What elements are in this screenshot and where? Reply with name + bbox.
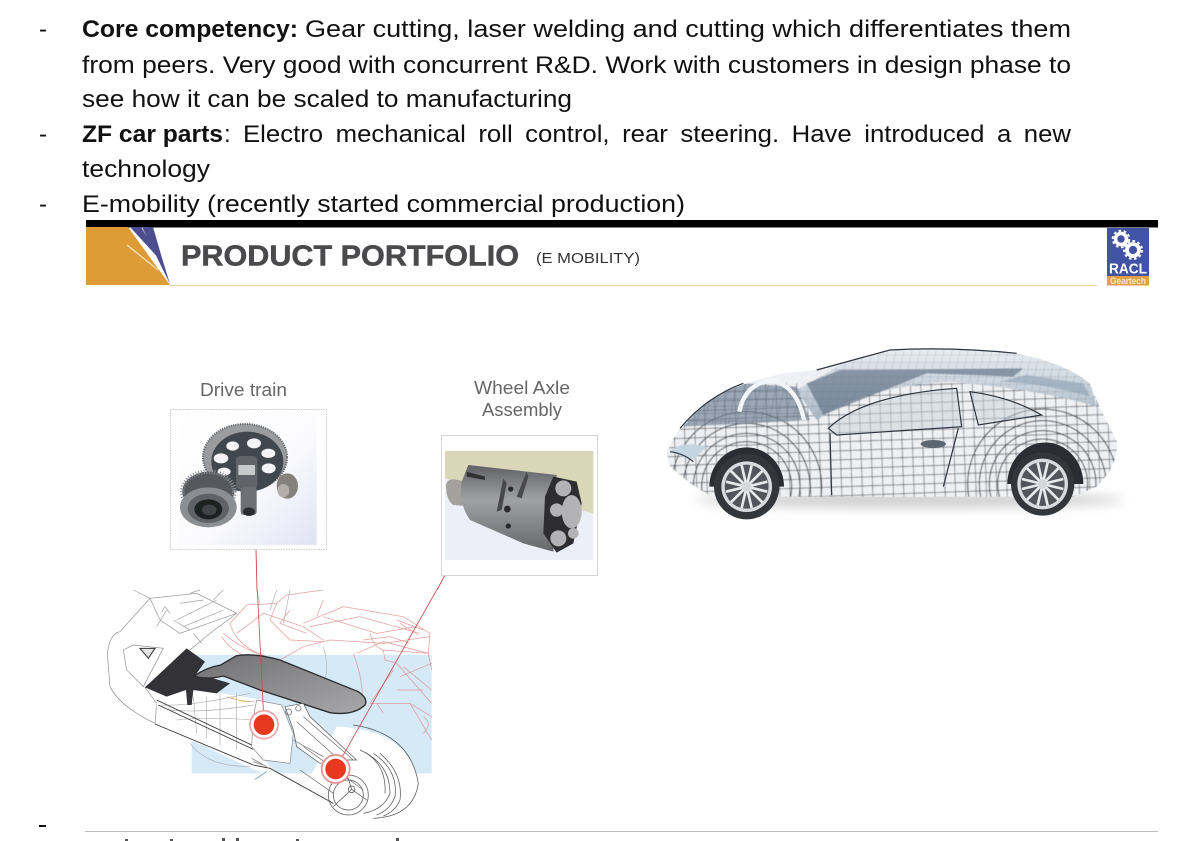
illustration: wireframe car	[667, 348, 1120, 520]
motorcycle line drawing	[107, 590, 437, 818]
windshield and roof glass	[797, 350, 1097, 420]
swing arm	[285, 703, 357, 763]
marker: wheel axle position	[322, 755, 350, 783]
logo: RACL Geartech: RACL	[1109, 260, 1147, 278]
seat	[194, 655, 366, 713]
dark frame	[145, 648, 230, 705]
label: wheel axle assembly	[474, 378, 570, 420]
logo: RACL Geartech: Geartech	[1110, 276, 1146, 286]
hood shading	[683, 383, 810, 427]
label: drive train: Drive train	[200, 380, 287, 400]
bullet: ZF car parts: -	[39, 121, 47, 148]
red ghost rear frame lines	[222, 590, 432, 740]
bullet: ZF car parts: technology	[82, 156, 210, 183]
footer dash and rule	[39, 825, 1158, 841]
bullet: ZF car parts: Electro mechanical roll control, rear steering. Have introduced a new	[243, 121, 1072, 148]
leader line: wheel axle	[337, 590, 437, 767]
leader line: wheel axle upper	[437, 575, 445, 590]
rear wheel	[1007, 442, 1083, 516]
title: PRODUCT PORTFOLIO	[181, 240, 519, 272]
bullet: core competency	[39, 16, 1071, 113]
body lines	[670, 349, 1042, 495]
bullet: ZF car parts: ZF car parts	[82, 121, 223, 148]
front wheel	[709, 447, 784, 519]
text block: bullet points	[39, 16, 1072, 218]
light blue backdrop	[192, 655, 432, 773]
photo: gears	[177, 413, 317, 545]
label: wheel axle assembly: Assembly	[482, 400, 562, 420]
bullet: core competency: -	[39, 16, 47, 43]
panel: drive train	[170, 380, 326, 550]
subtitle: (E MOBILITY)	[536, 250, 640, 267]
grey front fairing	[107, 593, 237, 723]
marker: drive train position	[250, 711, 278, 739]
door handle	[921, 440, 946, 448]
car body	[667, 350, 1117, 500]
wheel arch mesh curves	[672, 408, 1114, 497]
bullet: e-mobility: -	[39, 191, 47, 218]
slide header band	[86, 220, 1158, 286]
leader line: drive train	[257, 590, 264, 723]
white centre housing	[252, 700, 293, 763]
bullet: core competency: Core competency:	[82, 16, 298, 43]
label: wheel axle assembly: Wheel Axle	[474, 378, 570, 398]
icon: orange and blue header emblem	[86, 227, 170, 285]
logo: RACL Geartech	[1107, 228, 1149, 286]
bullet: ZF car parts: :	[224, 121, 231, 148]
front arch highlight	[739, 381, 804, 420]
panel: wheel axle assembly	[442, 378, 598, 576]
bullet: ZF car parts	[39, 121, 1072, 183]
photo: axle assembly	[445, 451, 593, 560]
side window tint	[828, 388, 962, 435]
mesh grid	[663, 383, 1123, 500]
rear wheel	[303, 725, 418, 818]
main lower frame lines	[155, 700, 333, 803]
ground shadow	[697, 492, 1123, 508]
bullet: core competency: Gear cutting, laser welding and cutting which differentiates them	[305, 16, 1071, 43]
bullet: e-mobility: E-mobility (recently started commercial production)	[82, 191, 685, 218]
bullet: core competency: from peers. Very good with concurrent R&D. Work with customers in design phase to	[82, 52, 1071, 79]
white body panel	[157, 690, 303, 790]
bullet: core competency: see how it can be scaled to manufacturing	[82, 86, 572, 113]
leader line: drive train upper	[256, 549, 257, 590]
